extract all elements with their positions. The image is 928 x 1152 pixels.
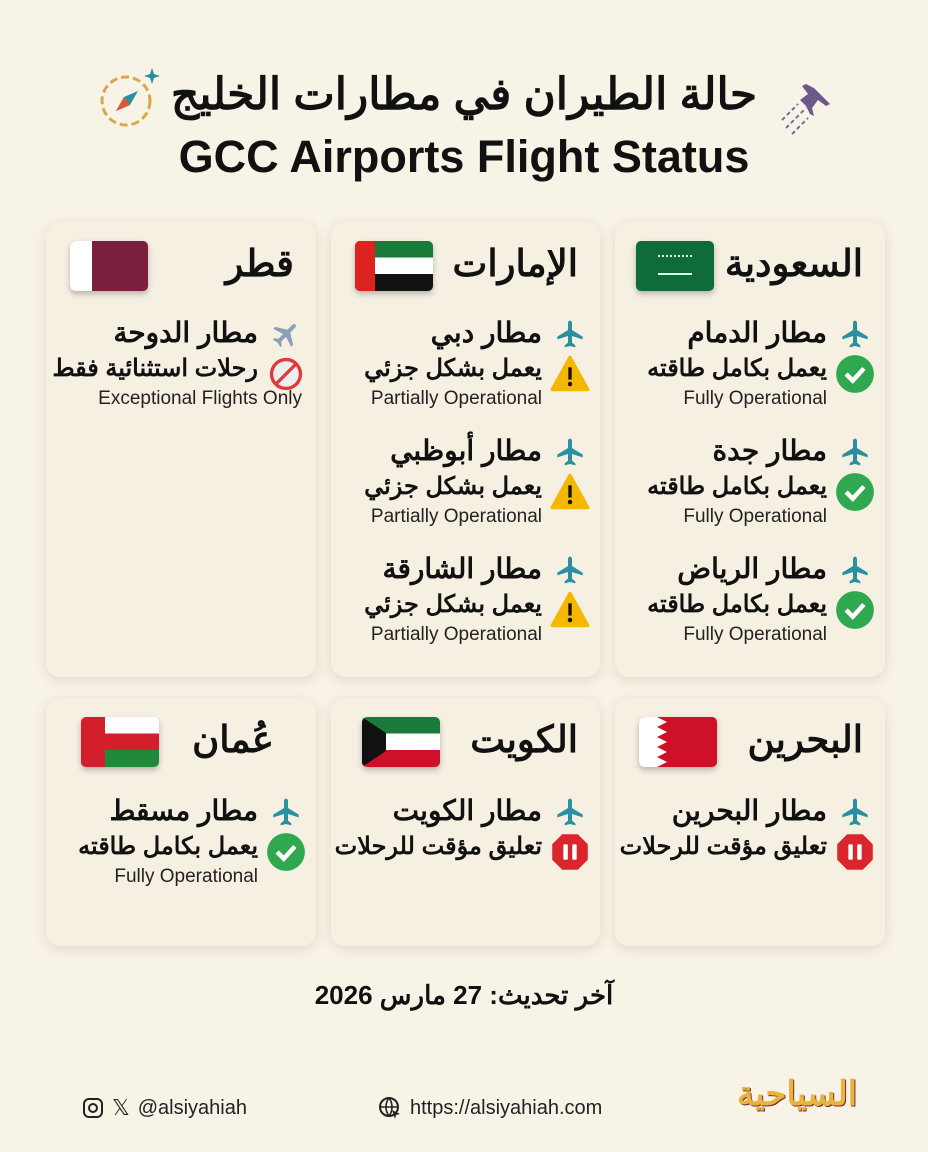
airport: Jeddah: Fully Operational: [683, 506, 827, 527]
airport: Sharjah: [364, 553, 590, 645]
airport: Kuwait: تعليق مؤقت للرحلات: [335, 833, 542, 860]
airport: Doha: مطار الدوحة: [113, 317, 258, 348]
airport: Abu Dhabi: [364, 431, 590, 527]
airport: Sharjah: مطار الشارقة: [382, 553, 542, 584]
airport: Bahrain: [620, 795, 873, 870]
footer: website: https://alsiyahiah.com: [410, 1096, 602, 1118]
airport: Jeddah: يعمل بكامل طاقته: [647, 473, 827, 500]
airport: Dammam: [647, 317, 874, 409]
flag: Qatar: [70, 241, 148, 291]
airport: Sharjah: يعمل بشكل جزئي: [364, 591, 542, 618]
airport: Riyadh: يعمل بكامل طاقته: [647, 591, 827, 618]
airport: Doha: Exceptional Flights Only: [98, 388, 302, 409]
flag: Bahrain: [639, 717, 717, 767]
panel: UAE: [331, 222, 600, 677]
panel: Oman: [46, 698, 316, 946]
airport: Muscat: Fully Operational: [114, 866, 258, 887]
footer: social: [83, 1095, 247, 1120]
airport: Dubai: [364, 317, 590, 409]
footer: social: @alsiyahiah: [138, 1096, 247, 1118]
airport: Dubai: مطار دبي: [431, 317, 542, 348]
title: حالة الطيران في مطارات الخليج: [171, 70, 757, 119]
last update: آخر تحديث: 27 مارس 2026: [315, 980, 613, 1010]
airport: Jeddah: مطار جدة: [713, 435, 827, 466]
airport: Abu Dhabi: Partially Operational: [371, 506, 542, 527]
panel: Saudi: [615, 222, 885, 677]
airport: Doha: [52, 317, 302, 409]
panel: Bahrain: البحرين: [748, 719, 863, 760]
airport: Riyadh: [647, 553, 874, 645]
panel: Qatar: قطر: [226, 243, 294, 284]
airport: Sharjah: Partially Operational: [371, 624, 542, 645]
panel: Oman: عُمان: [192, 719, 274, 760]
panel: Kuwait: الكويت: [470, 719, 578, 760]
footer: social: 𝕏: [112, 1095, 130, 1120]
airport: Bahrain: مطار البحرين: [672, 795, 827, 826]
airport: Kuwait: مطار الكويت: [393, 795, 542, 826]
flag: Saudi: [636, 241, 714, 291]
airport: Muscat: [78, 795, 305, 887]
title: [171, 70, 757, 182]
panel: Bahrain: [615, 698, 885, 946]
airport: Dubai: يعمل بشكل جزئي: [364, 355, 542, 382]
airport: Muscat: مطار مسقط: [109, 795, 258, 826]
panel: Kuwait: [331, 698, 600, 946]
flag: Oman: [81, 717, 159, 767]
airport: Riyadh: مطار الرياض: [677, 553, 827, 584]
panel: Qatar: [46, 222, 316, 677]
panel: Saudi: السعودية: [725, 243, 863, 284]
icon: compass: [100, 68, 160, 126]
title: GCC Airports Flight Status: [179, 131, 749, 182]
flag: UAE: [355, 241, 433, 291]
airport: Dammam: مطار الدمام: [687, 317, 827, 348]
airport: Bahrain: تعليق مؤقت للرحلات: [620, 833, 827, 860]
airport: Doha: رحلات استثنائية فقط: [52, 355, 258, 382]
airport: Abu Dhabi: مطار أبوظبي: [390, 435, 542, 466]
airport: Dammam: Fully Operational: [683, 388, 827, 409]
icon: plane with trails: [781, 84, 830, 135]
logo: السياحية: [737, 1075, 857, 1113]
airport: Riyadh: Fully Operational: [683, 624, 827, 645]
panel: UAE: الإمارات: [453, 243, 578, 284]
airport: Kuwait: [335, 795, 588, 870]
flag: Kuwait: [362, 717, 440, 767]
airport: Muscat: يعمل بكامل طاقته: [78, 833, 258, 860]
airport: Dammam: يعمل بكامل طاقته: [647, 355, 827, 382]
airport: Jeddah: [647, 435, 874, 527]
airport: Abu Dhabi: يعمل بشكل جزئي: [364, 473, 542, 500]
airport: Dubai: Partially Operational: [371, 388, 542, 409]
